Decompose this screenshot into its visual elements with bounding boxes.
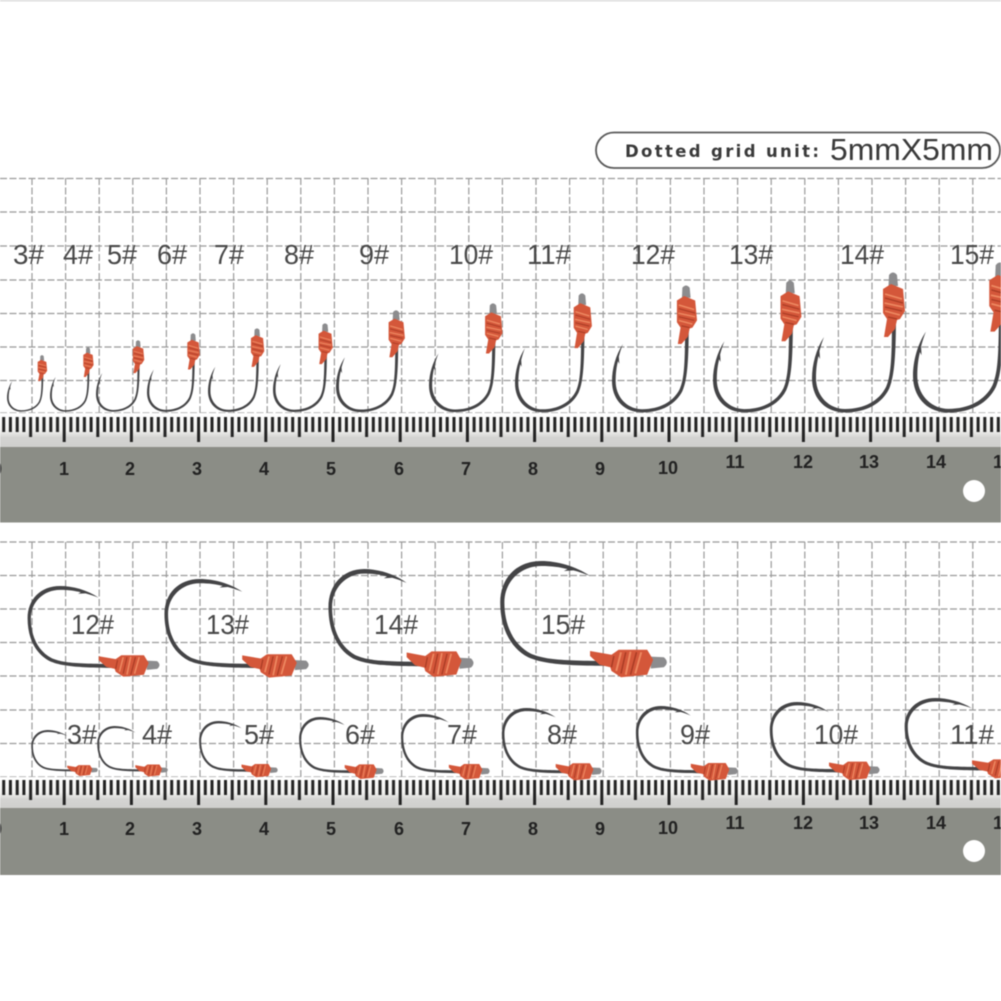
panel: bottom dotted grid xyxy=(0,542,1001,777)
hook 10# xyxy=(770,702,880,780)
ruler numbers: 1 xyxy=(59,459,69,479)
ruler tick marks xyxy=(0,413,1001,447)
panel: sideways large hooks row xyxy=(28,561,667,678)
ruler numbers: 13 xyxy=(859,813,879,833)
ruler numbers: 8 xyxy=(528,459,538,479)
hook 14# xyxy=(812,239,905,412)
hook 15#: 15# xyxy=(541,609,585,640)
hook 15#: 15# xyxy=(950,239,994,270)
ruler numbers: 13 xyxy=(859,452,879,472)
ruler numbers: 3 xyxy=(192,819,202,839)
hook 14#: 14# xyxy=(840,239,884,270)
hook 11#: 11# xyxy=(527,239,571,270)
hook 10#: 10# xyxy=(449,239,493,270)
hook 6# xyxy=(147,239,200,412)
ruler numbers: 11 xyxy=(725,452,745,472)
hook 6#: 6# xyxy=(345,719,375,750)
hook 12# xyxy=(28,586,159,677)
ruler body xyxy=(0,447,1001,522)
ruler numbers: 12 xyxy=(793,452,813,472)
ruler numbers: 2 xyxy=(125,459,135,479)
hook 8#: 8# xyxy=(547,719,577,750)
ruler scale band xyxy=(0,777,1001,808)
hook 4# xyxy=(97,719,172,776)
ruler numbers: 3 xyxy=(192,459,202,479)
hook 5#: 5# xyxy=(244,719,274,750)
ruler hole xyxy=(963,840,985,862)
hook 5# xyxy=(199,719,278,777)
ruler hole xyxy=(963,480,985,502)
ruler numbers: 6 xyxy=(394,819,404,839)
hook 9#: 9# xyxy=(359,239,389,270)
ruler numbers: 8 xyxy=(528,819,538,839)
hook 5# xyxy=(96,239,144,412)
hook 11#: 11# xyxy=(950,719,994,750)
hook 6#: 6# xyxy=(157,239,187,270)
hook 5#: 5# xyxy=(107,239,137,270)
hook 12#: 12# xyxy=(631,239,675,270)
panel: top ruler xyxy=(0,413,1001,522)
hook 3# xyxy=(7,239,47,412)
hook 8# xyxy=(502,708,602,780)
hook 4# xyxy=(50,239,94,412)
hook 4#: 4# xyxy=(142,719,172,750)
ruler numbers xyxy=(0,452,1001,479)
panel: top dotted grid xyxy=(0,178,1001,413)
hook 10# xyxy=(429,239,502,412)
ruler numbers: 12 xyxy=(793,813,813,833)
hook 7#: 7# xyxy=(214,239,244,270)
callout: grid unit xyxy=(596,132,1000,168)
ruler numbers: 9 xyxy=(595,459,605,479)
hook 14#: 14# xyxy=(374,609,418,640)
hook 4#: 4# xyxy=(63,239,93,270)
hook 11# xyxy=(905,698,1001,778)
callout: grid unit: Dotted grid unit: xyxy=(625,142,819,161)
ruler numbers: 10 xyxy=(658,818,678,838)
ruler numbers: 4 xyxy=(259,819,269,839)
hook 12# xyxy=(612,239,697,412)
hook 9# xyxy=(336,239,405,412)
ruler numbers: 6 xyxy=(394,459,404,479)
ruler scale band xyxy=(0,413,1001,447)
hook 13#: 13# xyxy=(206,609,249,640)
ruler numbers: 5 xyxy=(326,459,336,479)
ruler numbers: 14 xyxy=(926,813,946,833)
hook 3#: 3# xyxy=(67,719,97,750)
hook 8#: 8# xyxy=(284,239,314,270)
ruler numbers: 11 xyxy=(725,813,745,833)
ruler numbers xyxy=(0,813,1001,839)
hook 12#: 12# xyxy=(71,609,114,640)
hook 13#: 13# xyxy=(729,239,773,270)
hook 9#: 9# xyxy=(680,719,710,750)
ruler numbers: 7 xyxy=(461,819,471,839)
hook 3#: 3# xyxy=(13,239,44,270)
ruler numbers: 2 xyxy=(125,819,135,839)
hook 13# xyxy=(164,579,309,678)
ruler numbers: 5 xyxy=(326,819,336,839)
hook 8# xyxy=(273,239,333,412)
hook 7# xyxy=(208,239,264,412)
ruler tick marks xyxy=(0,777,1001,808)
hook 11# xyxy=(515,239,592,412)
hook 15# xyxy=(500,561,667,677)
ruler body xyxy=(0,808,1001,875)
hook 14# xyxy=(328,569,473,677)
hook 7#: 7# xyxy=(447,719,477,750)
hook 3# xyxy=(31,719,98,776)
ruler numbers: 9 xyxy=(595,819,605,839)
top edge line xyxy=(0,0,1001,2)
callout: grid unit: 5mmX5mm xyxy=(830,132,993,167)
hook 15# xyxy=(913,239,1001,413)
panel: sideways small hooks row xyxy=(31,698,1001,781)
panel: bottom ruler xyxy=(0,777,1001,875)
hook 7# xyxy=(401,714,490,779)
panel: upright hooks row xyxy=(7,239,1001,413)
hook 6# xyxy=(299,717,384,779)
ruler numbers: 10 xyxy=(658,458,678,478)
ruler numbers: 4 xyxy=(259,459,269,479)
ruler numbers: 1 xyxy=(59,819,69,839)
ruler numbers: 7 xyxy=(461,459,471,479)
hook 13# xyxy=(713,239,801,412)
ruler numbers: 14 xyxy=(926,452,946,472)
hook 9# xyxy=(636,706,738,781)
hook 10#: 10# xyxy=(814,719,858,750)
